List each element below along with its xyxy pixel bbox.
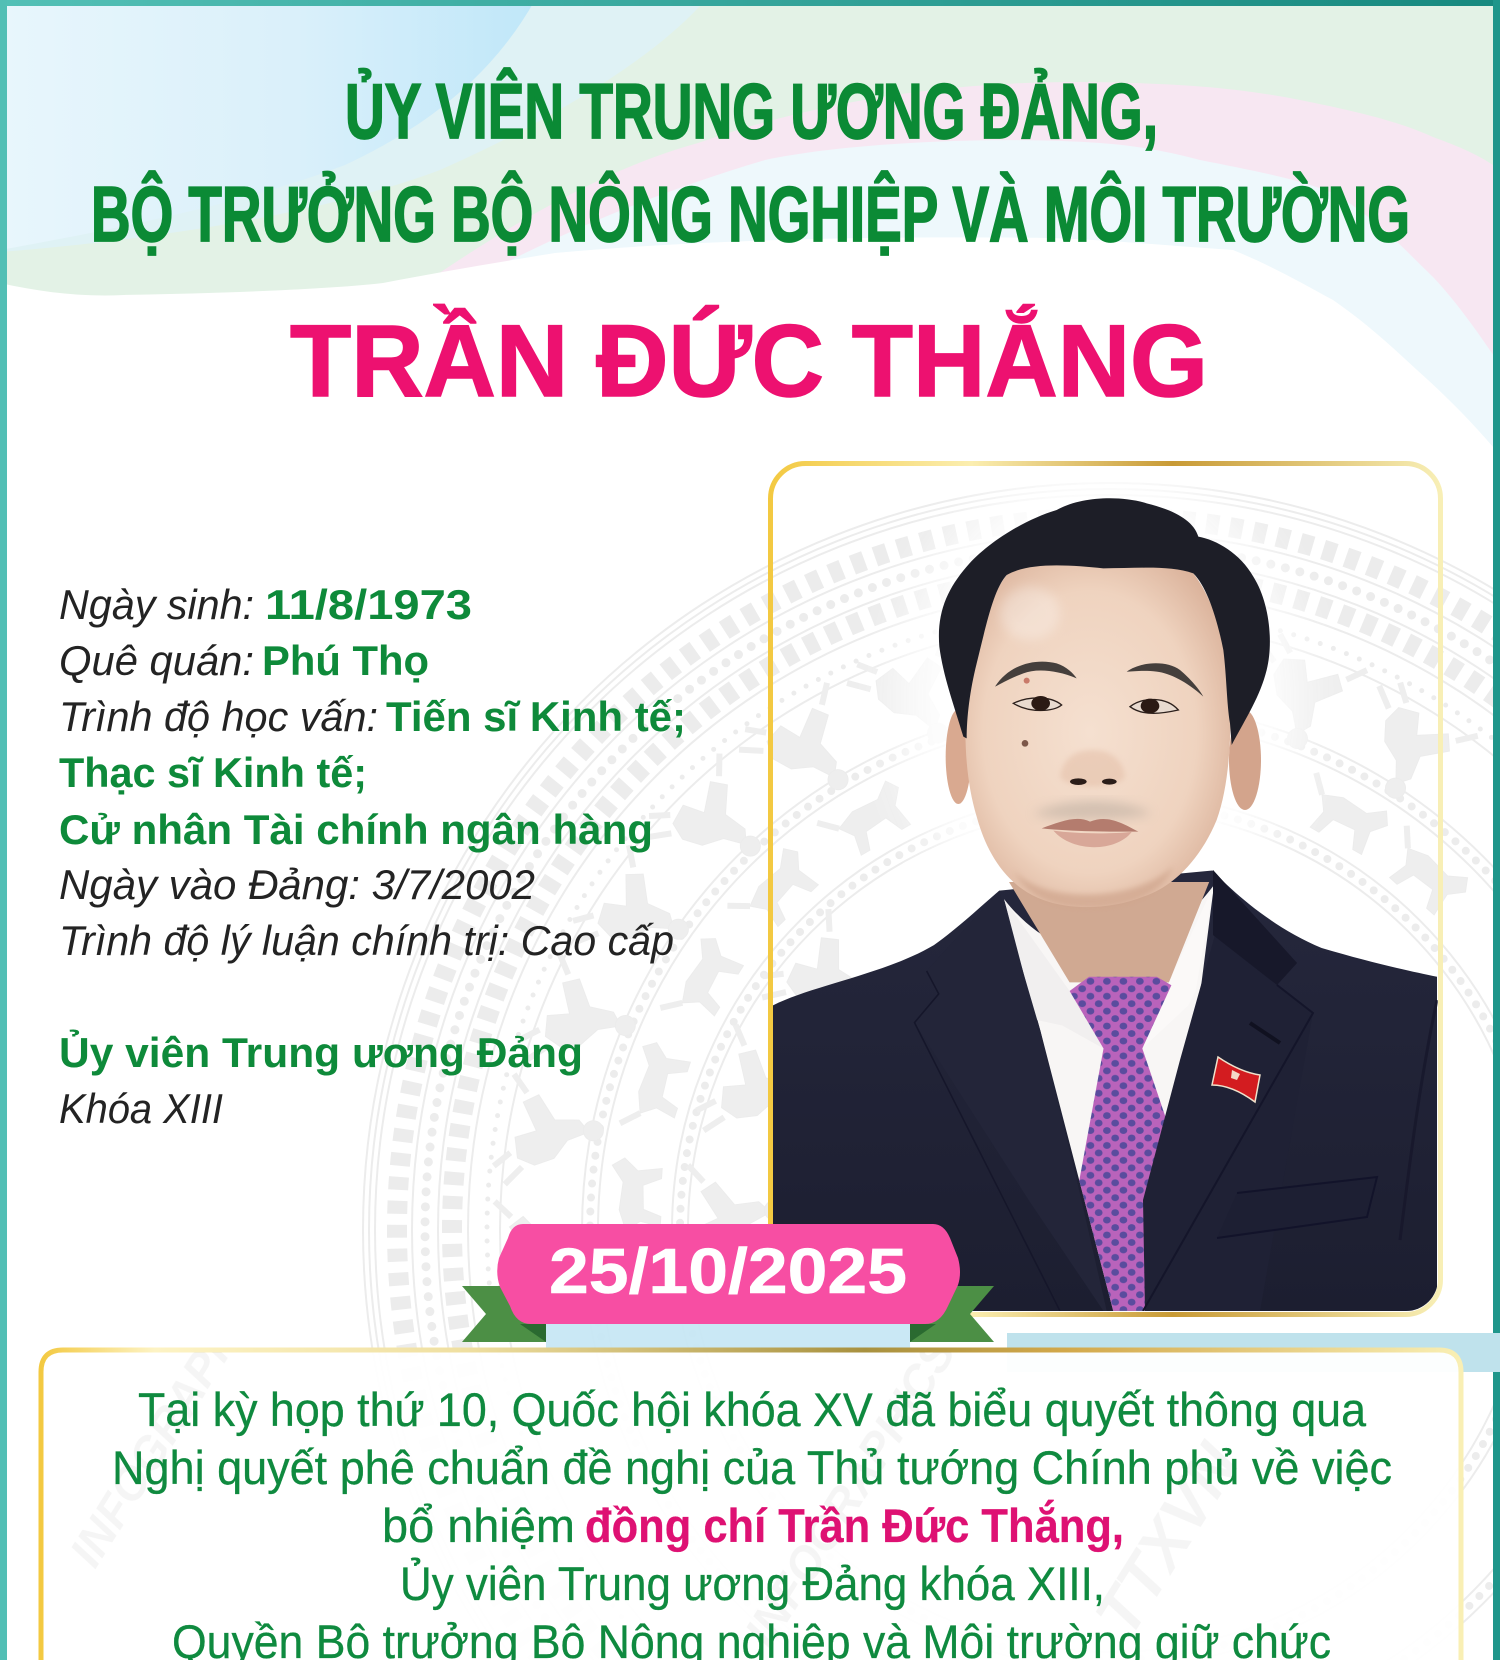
background wave: pale blue <box>507 140 1500 560</box>
biography text block <box>59 581 686 1132</box>
content panel <box>41 1350 1461 1660</box>
biography text block: Cử nhân Tài chính ngân hàng <box>59 806 653 853</box>
party badge <box>1212 1057 1260 1102</box>
body <box>773 870 1437 1318</box>
moles <box>1022 678 1030 747</box>
right lapel edge <box>1143 985 1313 1311</box>
title: ỦY VIÊN TRUNG ƯƠNG ĐẢNG, <box>345 67 1158 155</box>
nose <box>1060 750 1125 787</box>
announcement paragraph: bổ nhiệm <box>382 1499 575 1552</box>
pocket <box>1217 1177 1377 1238</box>
light blue band under date <box>546 1324 919 1358</box>
biography text block: Ủy viên Trung ương Đảng <box>59 1028 583 1076</box>
buttonhole <box>1250 1023 1280 1043</box>
bronze drum background pattern <box>363 483 1500 1660</box>
date text: 25/10/2025 <box>549 1235 907 1307</box>
date pill <box>497 1224 960 1324</box>
biography text block: Quê quán: <box>59 637 254 684</box>
date ribbon right <box>910 1286 994 1342</box>
left ear <box>946 709 971 804</box>
lips <box>1042 819 1138 847</box>
head <box>939 498 1270 908</box>
biography text block: Khóa XIII <box>59 1085 223 1132</box>
biography text block: Trình độ lý luận chính trị: Cao cấp <box>59 917 674 964</box>
face <box>965 557 1231 907</box>
suit <box>773 870 1437 1318</box>
biography text block: Phú Thọ <box>262 637 429 684</box>
watermark: INFOGRAPHICS <box>59 1248 291 1575</box>
right collar band <box>1213 870 1297 985</box>
head glow <box>902 482 1298 844</box>
left lapel <box>998 890 1106 1311</box>
announcement paragraph: Ủy viên Trung ương Đảng khóa XIII, <box>400 1557 1105 1610</box>
right eye <box>1130 699 1178 713</box>
right ear <box>1229 710 1261 810</box>
biography text block: Ngày sinh: <box>59 581 254 628</box>
shirt <box>1004 885 1214 1311</box>
forehead highlight <box>1000 587 1060 640</box>
tie <box>1070 977 1171 1311</box>
background wave: blue <box>0 0 535 250</box>
announcement paragraph <box>112 1383 1392 1660</box>
left collar <box>1004 899 1038 1020</box>
right collar <box>1169 979 1170 982</box>
left eye <box>1013 696 1062 711</box>
date ribbon left <box>462 1286 546 1342</box>
neck <box>1009 882 1209 982</box>
background wave: pink <box>400 82 1500 480</box>
biography text block: 11/8/1973 <box>265 581 472 628</box>
watermark: INFOGRAPHICS <box>734 1328 966 1655</box>
announcement paragraph: Tại kỳ họp thứ 10, Quốc hội khóa XV đã biểu quyết thông qua <box>138 1383 1367 1436</box>
portrait frame <box>770 464 1440 1314</box>
sleeve seam <box>1402 1000 1438 1218</box>
watermark: TTXVN <box>1081 1430 1254 1647</box>
biography text block: Thạc sĩ Kinh tế; <box>59 749 367 796</box>
title <box>91 67 1410 258</box>
announcement paragraph: Nghị quyết phê chuẩn đề nghị của Thủ tướng Chính phủ về việc <box>112 1441 1392 1494</box>
moustache shadow <box>1033 801 1152 820</box>
right suit front <box>1143 870 1226 1310</box>
background wave: pale blue diagonal <box>0 6 700 252</box>
biography text block: Trình độ học vấn: <box>59 693 378 740</box>
background wave: green <box>0 0 1500 450</box>
portrait photo <box>773 460 1437 1318</box>
watermark <box>72 1352 1237 1648</box>
light blue band right <box>1007 1333 1500 1372</box>
left lapel edge <box>914 971 1060 1311</box>
chin shading <box>1018 871 1170 907</box>
name heading: TRẦN ĐỨC THẮNG <box>290 304 1208 418</box>
biography text block: Tiến sĩ Kinh tế; <box>386 693 686 740</box>
eyebrows <box>995 662 1077 687</box>
hair <box>939 498 1270 745</box>
announcement paragraph: đồng chí Trần Đức Thắng, <box>585 1499 1124 1552</box>
biography text block: Ngày vào Đảng: 3/7/2002 <box>59 861 535 908</box>
